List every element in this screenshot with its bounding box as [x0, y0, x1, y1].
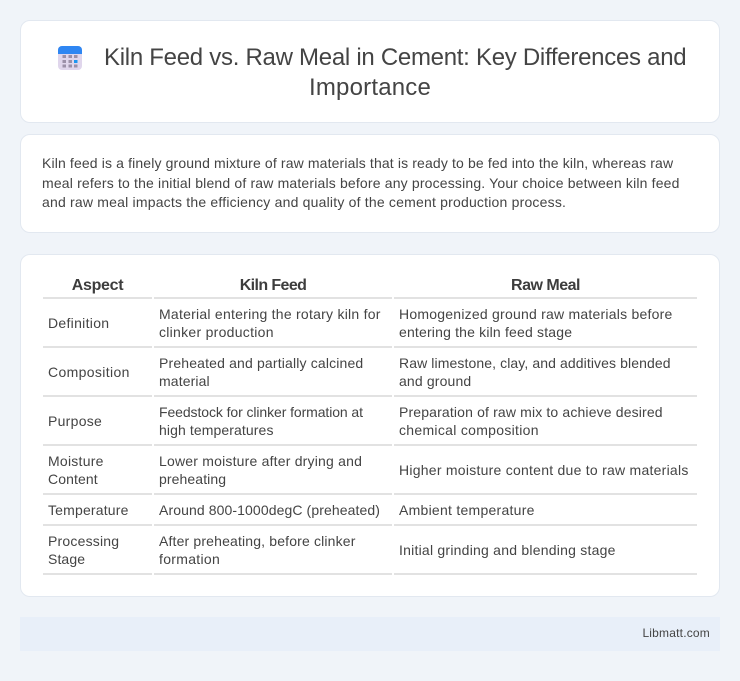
intro text: and raw meal impacts the efficiency and quality of the cement production process.	[42, 194, 566, 210]
row: Definition: Definition	[48, 315, 109, 331]
footer bar	[20, 617, 720, 651]
comparison table: preheating	[159, 471, 226, 487]
icon: calendar	[58, 46, 82, 70]
row: Moisture Content	[48, 453, 104, 487]
comparison table: clinker production	[159, 324, 274, 340]
comparison table: Higher moisture content due to raw materials	[399, 462, 689, 478]
title: Importance	[309, 74, 431, 101]
row: Processing Stage: Processing	[48, 533, 119, 549]
comparison table: Material entering the rotary kiln for	[159, 306, 381, 322]
intro text	[42, 155, 680, 210]
title	[104, 44, 686, 101]
comparison table: Ambient temperature	[399, 502, 535, 518]
row: Moisture Content: Content	[48, 471, 98, 487]
comparison table: chemical composition	[399, 422, 539, 438]
comparison table: Initial grinding and blending stage	[399, 542, 616, 558]
comparison table: Preheated and partially calcined	[159, 355, 363, 371]
comparison table: Around 800-1000degC (preheated)	[159, 502, 380, 518]
row: Processing Stage	[48, 533, 119, 567]
row: Composition: Composition	[48, 364, 130, 380]
comparison table: high temperatures	[159, 422, 274, 438]
table card	[20, 254, 720, 597]
comparison table: Preparation of raw mix to achieve desired	[399, 404, 663, 420]
column header: Aspect: Aspect	[72, 277, 123, 294]
row: Purpose: Purpose	[48, 413, 102, 429]
intro text: Kiln feed is a finely ground mixture of raw materials that is ready to be fed into the kiln, whereas raw	[42, 155, 673, 171]
column header: Kiln Feed: Kiln Feed	[240, 277, 306, 294]
intro card	[20, 134, 720, 233]
comparison table: Feedstock for clinker formation at	[159, 404, 363, 420]
row: Temperature: Temperature	[48, 502, 129, 518]
comparison table: Raw limestone, clay, and additives blended	[399, 355, 671, 371]
row: Processing Stage: Stage	[48, 551, 85, 567]
comparison table: formation	[159, 551, 220, 567]
comparison table: and ground	[399, 373, 471, 389]
comparison table: After preheating, before clinker	[159, 533, 356, 549]
intro text: meal refers to the initial blend of raw materials before any processing. Your choice between kiln feed	[42, 175, 680, 191]
column header: Raw Meal: Raw Meal	[511, 277, 580, 294]
header card	[20, 20, 720, 123]
comparison table: Homogenized ground raw materials before	[399, 306, 673, 322]
comparison table: entering the kiln feed stage	[399, 324, 572, 340]
comparison table: Lower moisture after drying and	[159, 453, 362, 469]
title: Kiln Feed vs. Raw Meal in Cement: Key Differences and	[104, 44, 686, 71]
comparison table: material	[159, 373, 210, 389]
row: Moisture Content: Moisture	[48, 453, 104, 469]
footer text: Libmatt.com	[642, 626, 710, 640]
